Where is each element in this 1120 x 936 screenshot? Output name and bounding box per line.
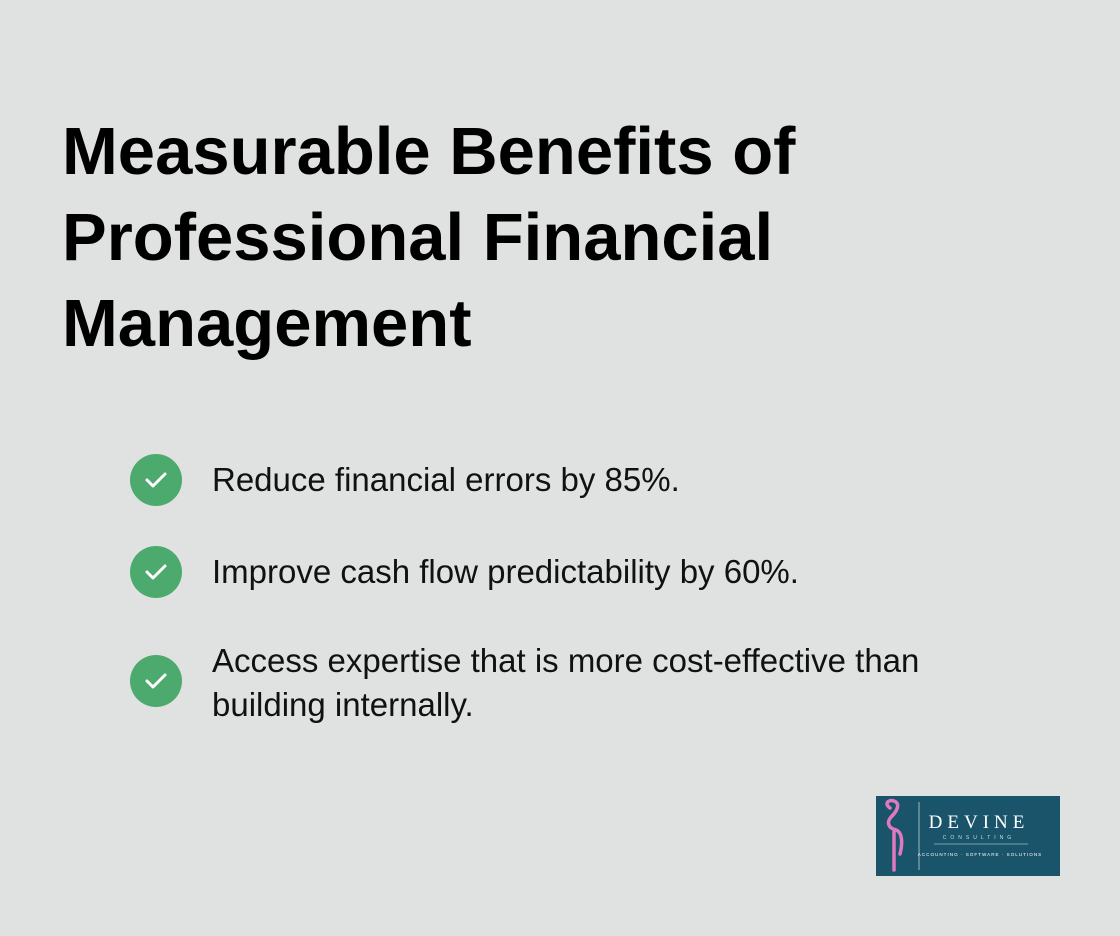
icon: check	[130, 655, 182, 707]
logo text: CONSULTING	[943, 835, 1015, 841]
logo text: DEVINE	[929, 812, 1029, 833]
title	[62, 114, 796, 361]
text: Reduce financial errors by 85%.	[212, 461, 680, 498]
logo text	[918, 812, 1042, 857]
text: Improve cash flow predictability by 60%.	[212, 553, 799, 590]
icon: flamingo	[887, 801, 902, 870]
title: Professional Financial	[62, 200, 773, 275]
icon: check	[130, 546, 182, 598]
item 1	[130, 454, 680, 506]
title: Measurable Benefits of	[62, 114, 795, 189]
logo	[876, 796, 1060, 876]
item 2	[130, 546, 799, 598]
title: Management	[62, 286, 472, 361]
logo text: ACCOUNTING · SOFTWARE · SOLUTIONS	[918, 852, 1042, 857]
icon: check	[130, 454, 182, 506]
item 3	[130, 642, 919, 723]
text: Access expertise that is more cost-effective than building internally.	[212, 642, 919, 723]
